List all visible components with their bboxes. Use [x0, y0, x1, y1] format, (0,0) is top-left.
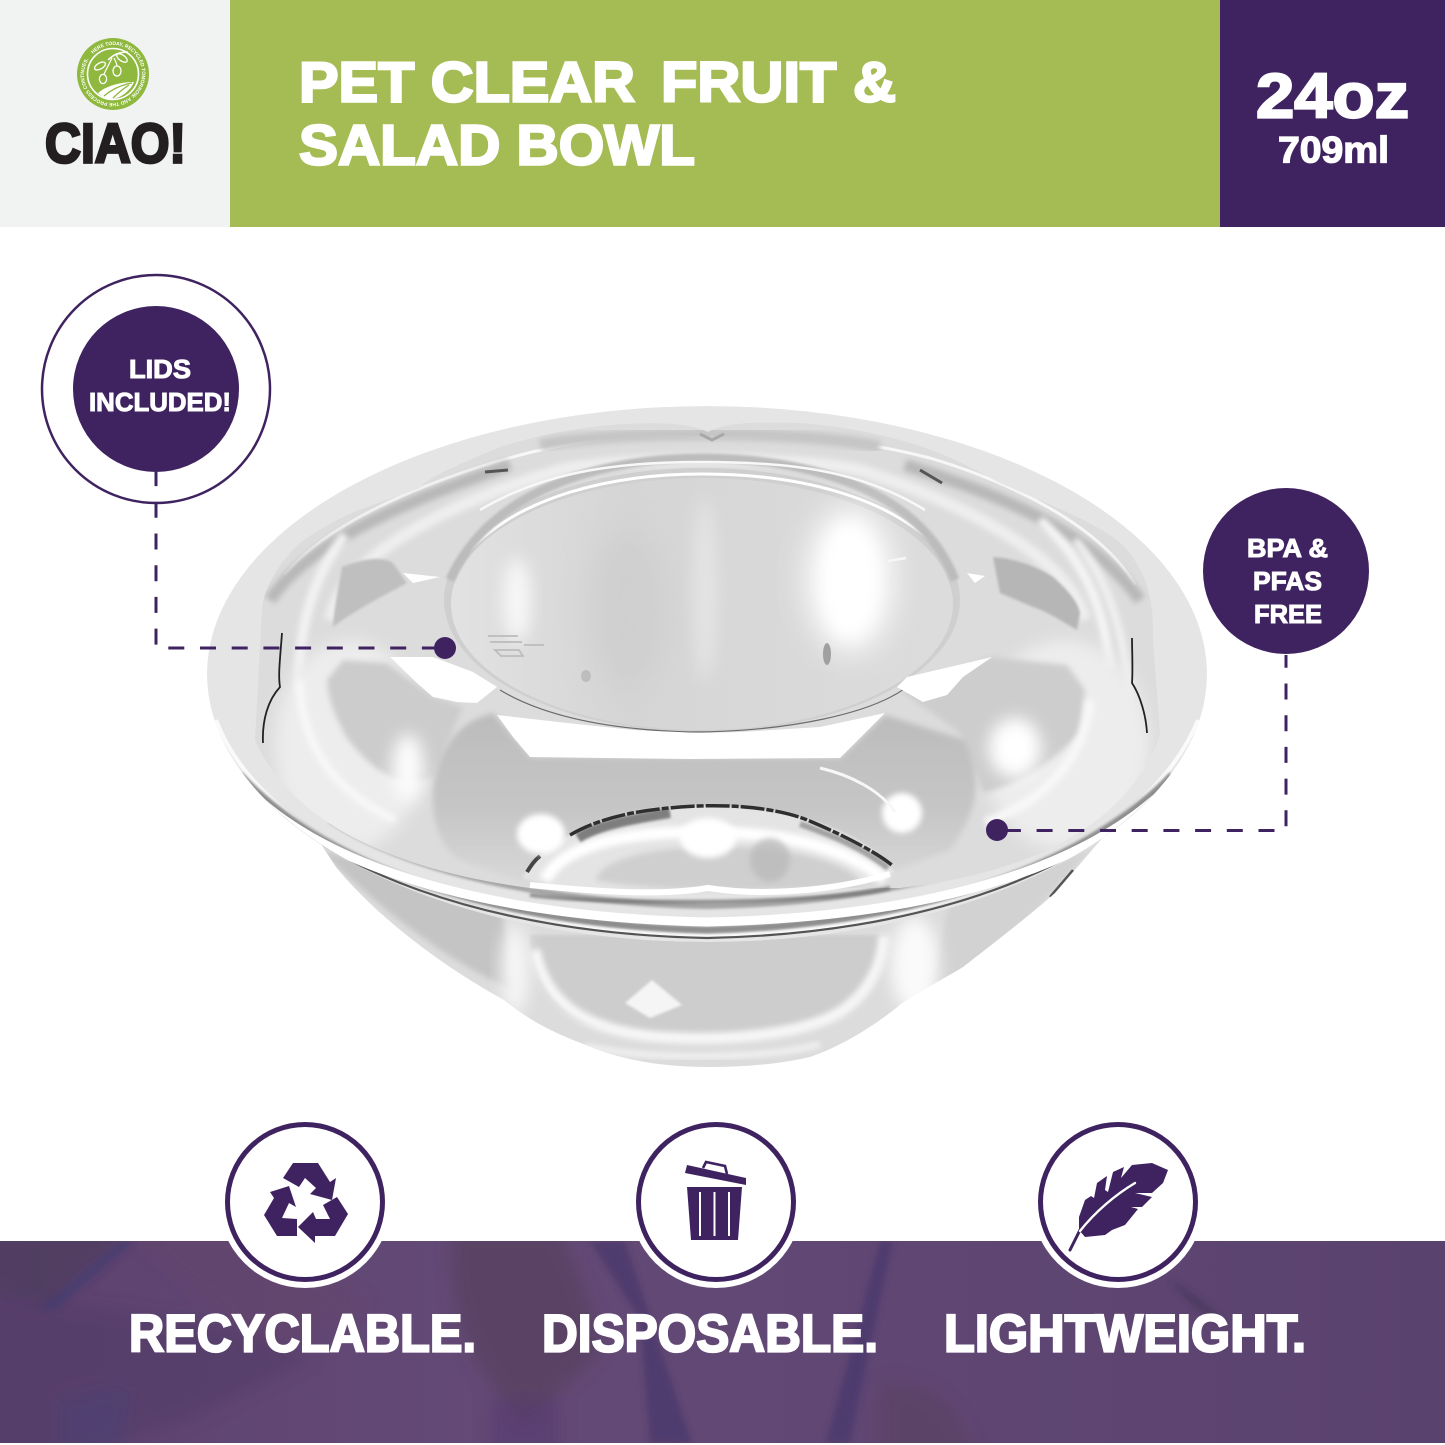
icon: trash can [685, 1162, 746, 1240]
bowl central cup [433, 713, 976, 889]
label: LIGHTWEIGHT. [944, 1304, 1306, 1364]
callout: BPA and PFAS free: PFAS [1253, 566, 1322, 596]
icon: feather [1070, 1163, 1168, 1250]
callout: lids included: INCLUDED! [89, 387, 231, 417]
dark seam lines [263, 633, 282, 743]
callout: lids included [42, 275, 456, 659]
product photo: clear bowl with lid [207, 406, 1207, 1070]
title: PET CLEAR [299, 50, 635, 114]
lid centre disk [444, 458, 960, 732]
dark upper-left petal [333, 559, 407, 627]
header: size panel [1220, 0, 1445, 227]
title: FRUIT & [661, 50, 896, 114]
feature: lightweight [944, 1116, 1306, 1364]
lid highlights and ribs [270, 434, 1140, 700]
callout: BPA and PFAS free: FREE [1254, 599, 1322, 629]
bowl floor [517, 768, 922, 902]
label: DISPOSABLE. [542, 1304, 878, 1364]
callout leader line [997, 655, 1286, 830]
bowl lower body [300, 830, 1120, 1070]
feature: recyclable [129, 1116, 476, 1364]
bowl rim flange [207, 406, 1207, 942]
callout dot [434, 637, 456, 659]
size in ounces: 24oz [1256, 62, 1409, 132]
icon: green olive badge: HERE TODAY, RECYCLED TOMORROW. AND THE PROCESS CONTINUES. [80, 42, 146, 106]
lid scalloped outer ring [250, 420, 1170, 900]
title [299, 50, 896, 178]
icon: recycling arrows [264, 1163, 348, 1243]
callout: BPA and PFAS free: BPA & [1247, 533, 1328, 563]
header: title panel [230, 0, 1220, 227]
logo wordmark: CIAO! [45, 112, 186, 174]
callout leader line [156, 472, 445, 648]
label: RECYCLABLE. [129, 1304, 476, 1364]
footer band with leaf pattern [0, 1230, 1445, 1445]
dark upper-right petal [993, 557, 1080, 630]
size in millilitres: 709ml [1278, 130, 1389, 170]
white reflections [390, 573, 992, 759]
callout: lids included: LIDS [129, 354, 191, 384]
callout: BPA and PFAS free [986, 488, 1369, 841]
lower side petals [275, 640, 1150, 850]
header: logo panel [0, 0, 230, 227]
title: SALAD BOWL [299, 114, 695, 178]
feature: disposable [542, 1116, 878, 1364]
callout dot [986, 819, 1008, 841]
